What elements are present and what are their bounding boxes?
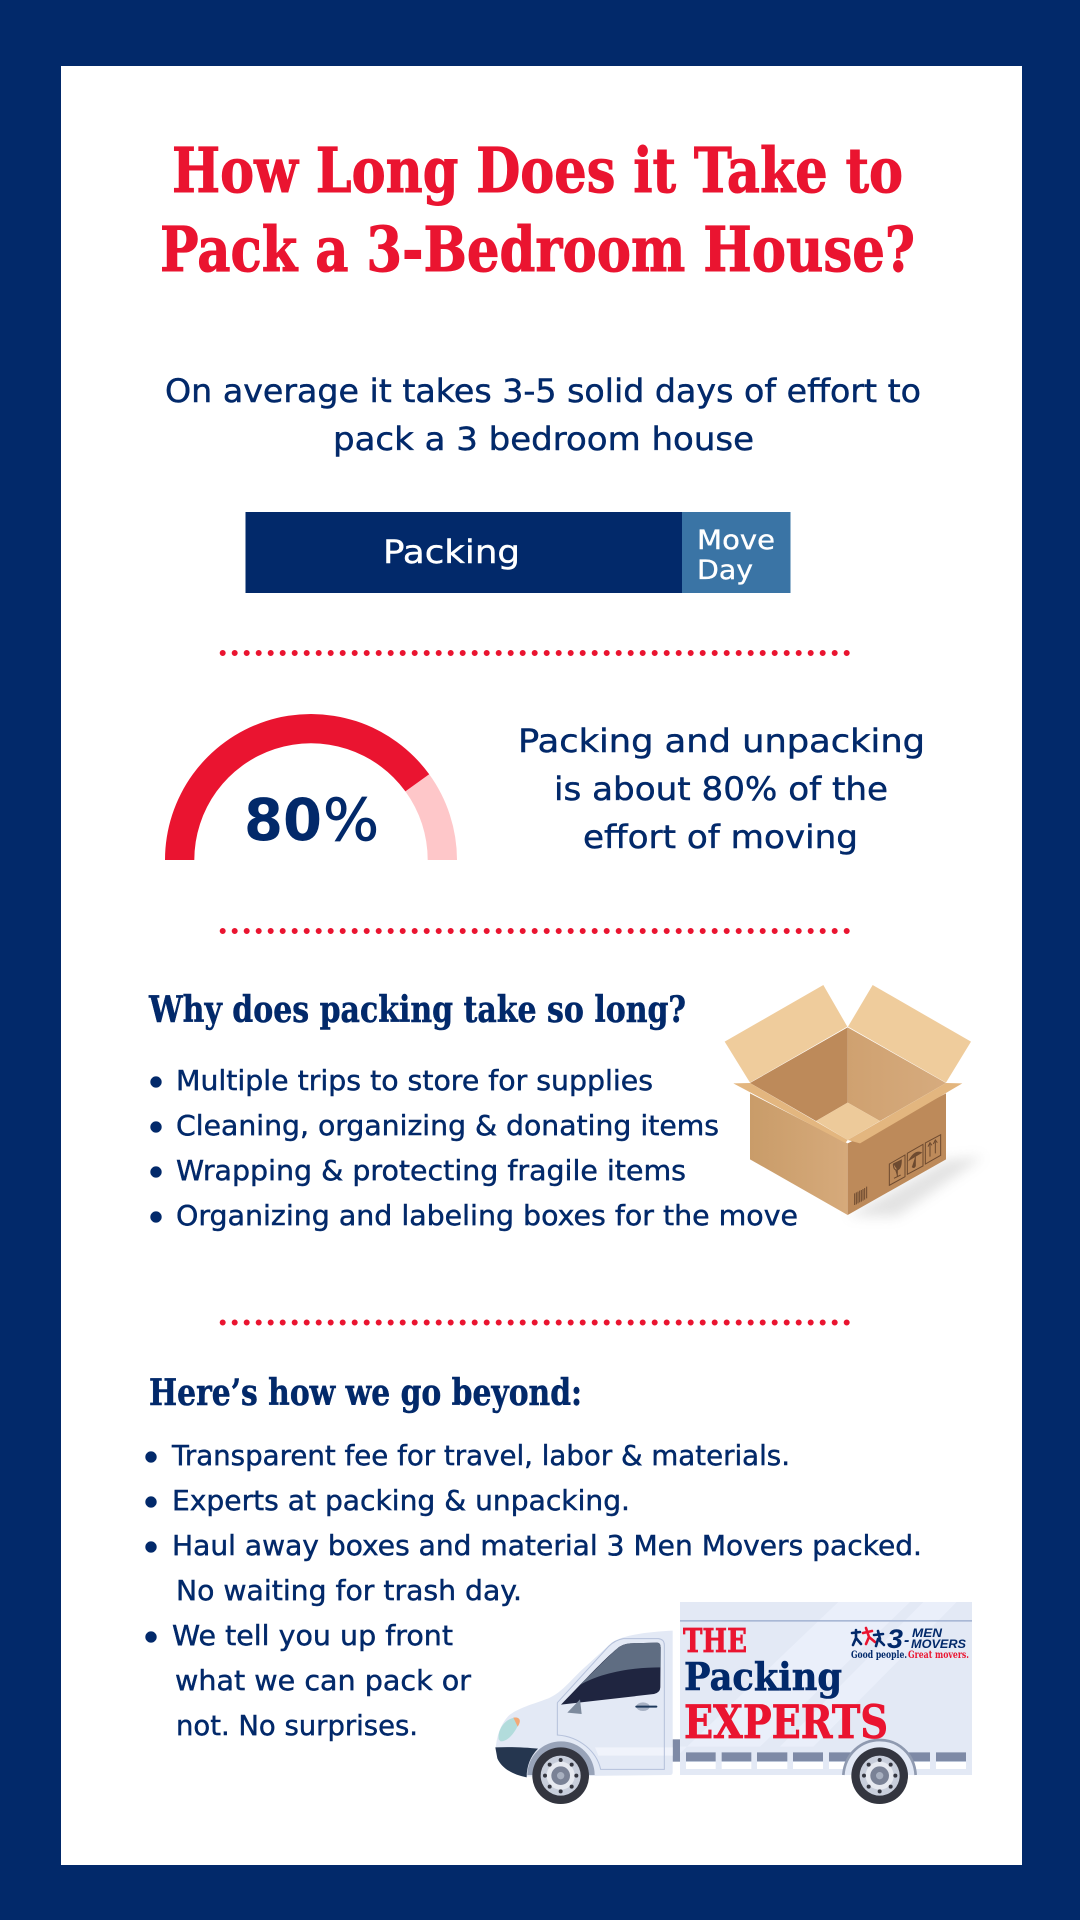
door handle (636, 1702, 650, 1711)
logo tagline: Good people. (851, 1650, 907, 1661)
logo wordmark: MEN (912, 1628, 943, 1640)
list: reasons packing takes long: Multiple trips to store for supplies (176, 1064, 653, 1097)
logo wordmark (887, 1624, 966, 1654)
list: how we go beyond: Experts at packing & unpacking. (172, 1484, 630, 1517)
side stripes (686, 1752, 966, 1769)
move day label: Day (697, 555, 753, 586)
window dark (561, 1643, 661, 1705)
heading: here's how we go beyond: Here’s how we go beyond: (149, 1372, 582, 1414)
rear wheel (851, 1747, 908, 1804)
packing label: Packing (383, 533, 520, 571)
logo tagline: Great movers. (908, 1650, 969, 1661)
logo tagline (851, 1650, 969, 1661)
list: reasons packing takes long: Wrapping & protecting fragile items (176, 1154, 686, 1187)
rear wheel arch (843, 1740, 916, 1775)
front rim left (733, 1083, 848, 1143)
logo: 3 Men Movers (851, 1624, 969, 1661)
logo wordmark: 3 (887, 1624, 903, 1654)
gauge value: 80 (244, 786, 322, 854)
cab highlight band (595, 1747, 673, 1756)
heading: why does packing take so long: Why does packing take so long? (148, 989, 686, 1031)
door outline (557, 1639, 664, 1769)
illustration: moving truck (495, 1602, 972, 1804)
truck signage text (683, 1621, 888, 1749)
side mirror (567, 1699, 582, 1714)
list: how we go beyond (146, 1439, 922, 1742)
truck signage text: EXPERTS (684, 1695, 888, 1749)
list: how we go beyond: Transparent fee for travel, labor & materials. (171, 1439, 790, 1472)
effort statement: effort of moving (583, 818, 858, 856)
front rim right (848, 1083, 962, 1143)
list: reasons packing takes long (150, 1064, 798, 1232)
logo runners (852, 1628, 884, 1646)
logo wordmark: MOVERS (911, 1639, 966, 1651)
move day label: Move (697, 525, 775, 556)
cab body (496, 1631, 673, 1777)
left flap (725, 985, 847, 1083)
cargo top line (680, 1620, 972, 1622)
list: reasons packing takes long: Organizing and labeling boxes for the move (176, 1199, 798, 1232)
handling symbols (889, 1135, 941, 1185)
subtitle text (165, 372, 921, 458)
front wheel arch (527, 1741, 595, 1775)
box shadow (848, 1157, 983, 1217)
outer right wall (848, 1093, 946, 1215)
list: how we go beyond: We tell you up front (172, 1619, 453, 1652)
front wheel (532, 1747, 589, 1804)
subtitle text: On average it takes 3-5 solid days of effort to (165, 372, 921, 410)
inner left wall (750, 1027, 848, 1121)
logo wordmark: - (904, 1632, 909, 1649)
list: how we go beyond: what we can pack or (175, 1664, 471, 1697)
title (160, 134, 915, 286)
list: how we go beyond: No waiting for trash day. (176, 1574, 522, 1607)
inner right wall (848, 1027, 946, 1121)
title: How Long Does it Take to (172, 134, 903, 207)
move day label (697, 525, 775, 586)
effort statement: is about 80% of the (554, 770, 888, 808)
packing segment (246, 512, 682, 593)
gauge filled arc (165, 714, 429, 860)
timeline bar: packing vs move day (246, 512, 790, 593)
move day segment (682, 512, 790, 593)
cargo box (680, 1602, 972, 1775)
box floor (816, 1103, 880, 1140)
list: how we go beyond: not. No surprises. (176, 1709, 418, 1742)
icon: open cardboard box (725, 985, 983, 1217)
outer left wall (750, 1093, 848, 1215)
effort statement: Packing and unpacking (518, 722, 925, 760)
window reflection (580, 1643, 661, 1685)
title: Pack a 3-Bedroom House? (160, 213, 915, 286)
subtitle text: pack a 3 bedroom house (333, 420, 754, 458)
barcode (855, 1187, 867, 1205)
truck shapes (495, 1602, 972, 1804)
right flap (848, 985, 971, 1083)
gauge remainder arc (405, 774, 457, 860)
cargo box light reflections (680, 1602, 957, 1753)
list: how we go beyond: Haul away boxes and material 3 Men Movers packed. (172, 1529, 922, 1562)
bumper (495, 1747, 538, 1777)
effort statement (518, 722, 925, 856)
headlight (499, 1717, 520, 1741)
list: reasons packing takes long: Cleaning, organizing & donating items (176, 1109, 719, 1142)
chassis connector (673, 1739, 680, 1762)
gauge chart: 80% (165, 714, 457, 860)
gauge value: % (323, 786, 379, 854)
truck signage text: Packing (684, 1654, 842, 1699)
truck signage text: THE (683, 1621, 747, 1660)
